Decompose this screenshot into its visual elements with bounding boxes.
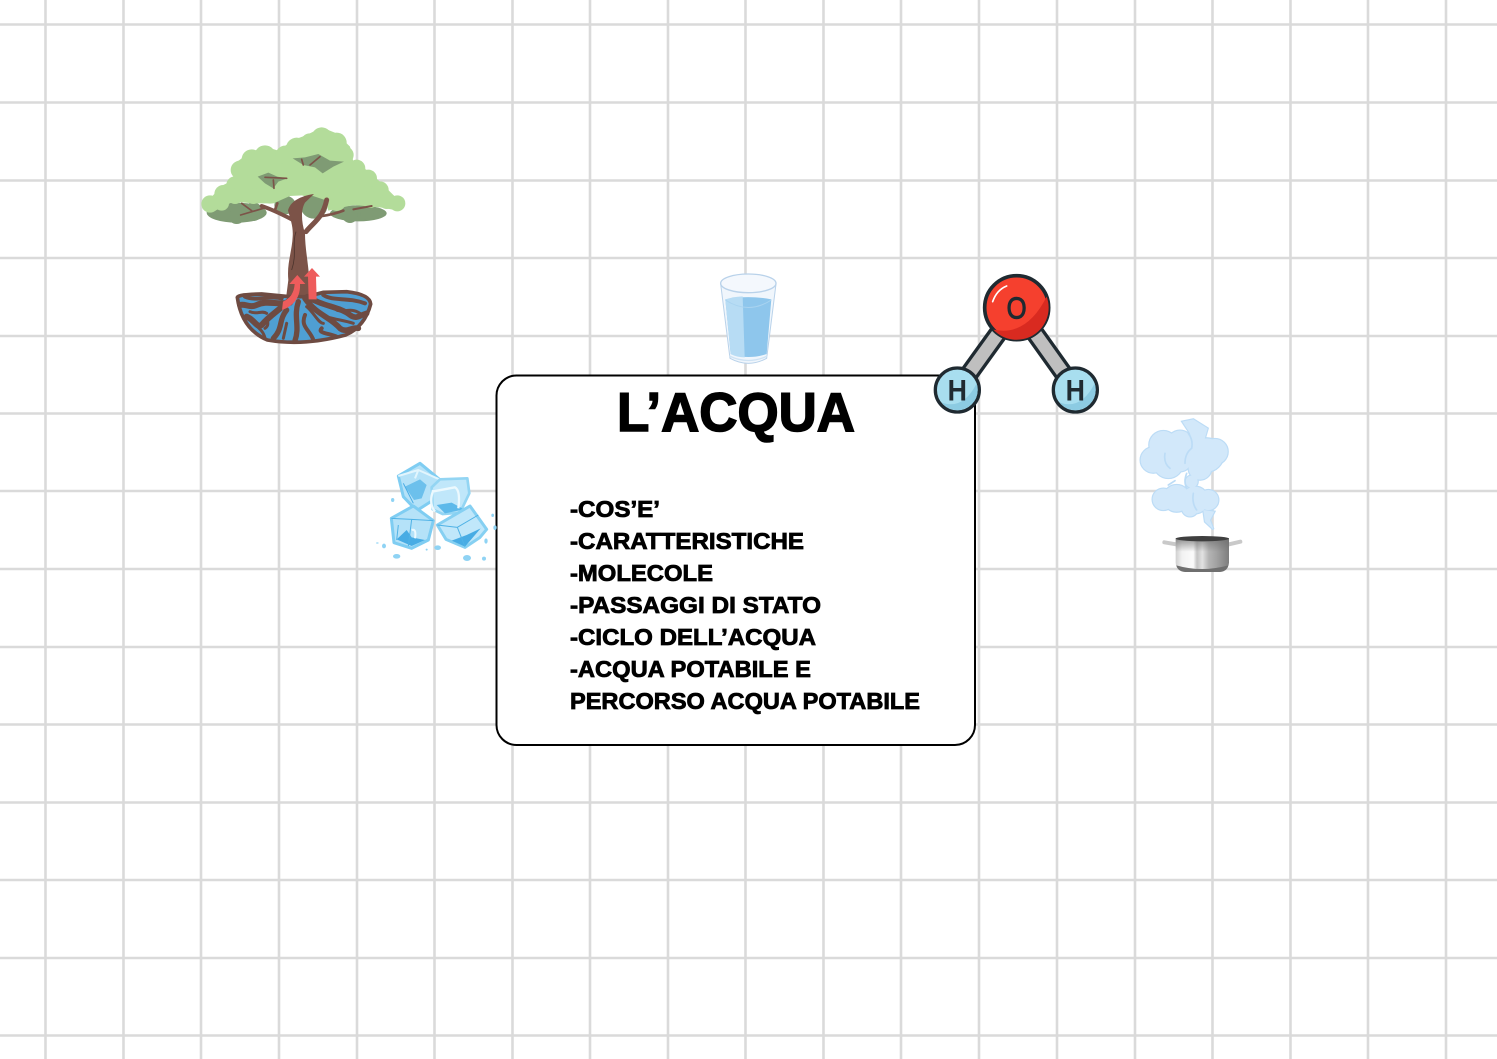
icon: tree with roots — [201, 127, 405, 342]
steam cloud — [1141, 419, 1228, 529]
back cube left — [398, 463, 439, 511]
front cube left — [391, 506, 433, 548]
icon: water molecule — [935, 276, 1097, 412]
icon: glass of water — [721, 274, 776, 363]
text block: contents list: -CICLO DELL’ACQUA — [570, 624, 816, 650]
hydrogen atom right: H — [1066, 374, 1085, 407]
bonds — [957, 308, 1075, 390]
back cube right — [431, 478, 469, 514]
text block: contents list: -CARATTERISTICHE — [570, 528, 804, 554]
rim — [721, 274, 776, 293]
trunk and branches — [286, 194, 314, 298]
water — [725, 297, 771, 357]
icon: ice cubes — [376, 463, 497, 561]
text block: contents list: -ACQUA POTABILE E — [570, 656, 811, 682]
foliage gaps — [293, 154, 344, 173]
panel: central card — [496, 376, 975, 745]
steam inner contours — [1165, 433, 1197, 510]
oxygen atom: O — [1007, 291, 1027, 325]
steam outline — [1141, 419, 1228, 529]
dark foliage — [207, 193, 387, 224]
text block: contents list: -COS’E’ — [570, 496, 660, 522]
text block: contents list — [570, 496, 920, 714]
light foliage — [201, 127, 405, 213]
oxygen atom — [985, 276, 1049, 340]
hydrogen atom right — [1053, 368, 1097, 412]
text block: contents list: -PASSAGGI DI STATO — [570, 592, 821, 618]
hydrogen atom left — [935, 368, 979, 412]
hydrogen atom left: H — [948, 374, 967, 407]
arrows: water rising — [282, 268, 320, 310]
roots — [240, 295, 367, 341]
front cube right — [437, 506, 487, 547]
icon: steam and pot — [1141, 419, 1240, 572]
pot rim — [1176, 536, 1229, 541]
pot body — [1176, 538, 1229, 572]
text block: contents list: -MOLECOLE — [570, 560, 713, 586]
pot handles — [1164, 542, 1240, 544]
root ball — [237, 292, 371, 342]
text block: contents list: PERCORSO ACQUA POTABILE — [570, 688, 920, 714]
heading: L’ACQUA — [617, 381, 855, 443]
water droplets — [376, 498, 497, 561]
